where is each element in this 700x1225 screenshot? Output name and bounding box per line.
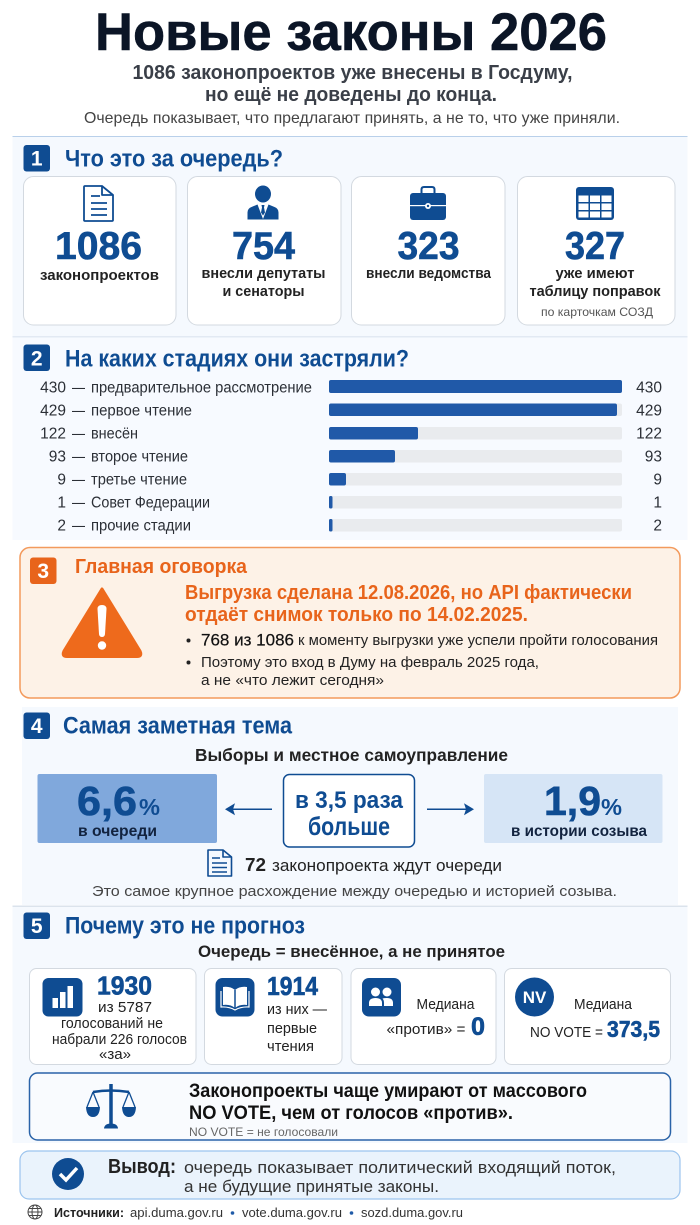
- card: 754: 754: [232, 225, 295, 268]
- banner: no vote conclusion: NO VOTE = не голосовали: [189, 1125, 338, 1139]
- badge 3: 3: [37, 560, 49, 583]
- ratio box: в 3,5 раза: [295, 787, 404, 814]
- warning bullets: Поэтому это вход в Думу на февраль 2025 года,: [201, 654, 539, 671]
- card: 323: 323: [398, 225, 460, 268]
- card: 323: [352, 176, 505, 325]
- card: 1914: [204, 968, 342, 1064]
- bar chart: stages: 122: [40, 426, 66, 442]
- bar chart: stages: прочие стадии: [91, 518, 191, 534]
- badge 1: [24, 145, 50, 172]
- card: 1914: из них —: [267, 1002, 327, 1018]
- sources footer: vote.duma.gov.ru: [242, 1205, 342, 1220]
- icon: NV badge: [515, 978, 554, 1016]
- warning bullets: 768 из 1086: [201, 632, 294, 650]
- card: 754: внесли депутаты: [202, 266, 326, 282]
- bar chart: stages: 93: [645, 448, 662, 466]
- warning bullets: а не «что лежит сегодня»: [201, 672, 384, 689]
- bar chart: stages: 430: [40, 380, 66, 396]
- warning headline: отдаёт снимок только по 14.02.2025.: [185, 603, 528, 626]
- card: 1930: из 5787: [98, 1000, 152, 1016]
- heading 5: Почему это не прогноз: [65, 912, 305, 940]
- bar chart: stages: первое чтение: [91, 402, 192, 420]
- card: 754: и сенаторы: [222, 284, 304, 300]
- panel: conclusion: а не будущие принятые законы.: [184, 1178, 439, 1196]
- card: 1914: чтения: [267, 1039, 314, 1055]
- bar chart: stages: —: [72, 380, 85, 396]
- card: 1930: голосований не: [61, 1016, 163, 1032]
- sources footer: api.duma.gov.ru: [130, 1205, 223, 1220]
- bar chart: stages: предварительное рассмотрение: [91, 380, 312, 396]
- bar chart: stages: 9: [57, 472, 66, 488]
- card: median against: 0: [471, 1013, 485, 1041]
- card: median no vote: [504, 968, 670, 1064]
- icon: scales: [86, 1084, 136, 1128]
- bar chart: stages: —: [72, 494, 85, 512]
- icon: people: [362, 978, 401, 1016]
- stat: history share: %: [601, 794, 622, 820]
- badge 3: [30, 558, 56, 584]
- badge 2: [24, 344, 50, 371]
- bar chart: stages: 122: [636, 426, 662, 442]
- ratio box: больше: [308, 811, 390, 841]
- card: 327: по карточкам СОЗД: [541, 305, 653, 319]
- banner: no vote conclusion: Законопроекты чаще умирают от массового: [189, 1080, 587, 1102]
- sources footer: sozd.duma.gov.ru: [361, 1205, 463, 1220]
- icon: bar chart: [42, 978, 82, 1016]
- banner: no vote conclusion: NO VOTE, чем от голосов «против».: [189, 1102, 513, 1124]
- bar chart: stages: 1: [653, 494, 662, 512]
- bar chart: stages: третье чтение: [91, 472, 187, 488]
- card: 1086: законопроектов: [40, 268, 159, 284]
- card: 1930: [30, 968, 196, 1064]
- card: median no vote: Медиана: [574, 997, 633, 1013]
- card: 1914: 1914: [267, 971, 318, 1001]
- card: 1086: [24, 176, 176, 325]
- ratio box: [284, 774, 414, 847]
- icon: warning triangle: [63, 589, 141, 656]
- bar chart: stages: второе чтение: [91, 448, 188, 466]
- subtitle: [132, 61, 572, 106]
- card: 1914: первые: [267, 1021, 317, 1037]
- stat: history share: [484, 774, 662, 843]
- badge 2: 2: [31, 348, 43, 370]
- card: median no vote: 373,5: [607, 1016, 660, 1042]
- stat: queue share: [38, 774, 217, 843]
- stat: history share: 1,9: [544, 778, 601, 824]
- icon: table: [576, 187, 614, 220]
- card: 1930: набрали 226 голосов: [52, 1032, 187, 1048]
- bar chart: stages: —: [72, 472, 85, 488]
- arrow right: [427, 803, 474, 815]
- card: 327: таблицу поправок: [530, 284, 661, 300]
- badge 4: 4: [31, 715, 43, 738]
- panel: section 3 warning: [20, 548, 680, 698]
- bar chart: stages: 9: [653, 472, 662, 488]
- card: median no vote: NO VOTE =: [530, 1025, 603, 1041]
- bar chart: stages: —: [72, 448, 85, 466]
- waiting bills count: 72: [245, 854, 266, 875]
- panel: conclusion: очередь показывает политический входящий поток,: [184, 1159, 616, 1177]
- panel: section 5: [12, 907, 688, 1143]
- card: 327: уже имеют: [556, 266, 634, 282]
- panel: section 2: [12, 338, 688, 540]
- warning bullets: [186, 632, 658, 689]
- bar chart: stages: 93: [49, 448, 66, 466]
- card: median against: Медиана: [416, 997, 475, 1013]
- bar chart: stages: 430: [636, 380, 662, 396]
- card: median against: [351, 968, 496, 1064]
- bar chart: stages: 429: [40, 402, 66, 420]
- warning headline: [185, 581, 632, 626]
- warning headline: Выгрузка сделана 12.08.2026, но API фактически: [185, 581, 632, 604]
- icon: check: [52, 1158, 84, 1190]
- bar chart: stages: Совет Федерации: [91, 494, 210, 512]
- card: 1086: 1086: [55, 225, 142, 268]
- panel: conclusion: Вывод:: [108, 1156, 176, 1178]
- bar chart: stages: 429: [636, 402, 662, 420]
- arrow left: [225, 803, 272, 815]
- bar chart: stages: —: [72, 402, 85, 420]
- stat: history share: в истории созыва: [511, 823, 647, 840]
- icon: document small: [208, 850, 232, 876]
- card: 754: [188, 176, 341, 325]
- heading 2: На каких стадиях они застряли?: [65, 346, 409, 372]
- card: 323: внесли ведомства: [366, 266, 492, 282]
- badge 1: 1: [31, 148, 43, 170]
- panel: section 4: [22, 707, 678, 905]
- badge 5: [24, 912, 50, 939]
- warning bullets: к моменту выгрузки уже успели пройти голосования: [298, 633, 658, 649]
- bar chart: stages: —: [72, 426, 85, 442]
- header: [84, 3, 620, 127]
- banner: no vote conclusion: [30, 1073, 670, 1140]
- icon: document: [84, 186, 113, 221]
- stat: queue share: в очереди: [78, 823, 157, 840]
- panel: section 1: [12, 137, 688, 336]
- icon: person: [248, 186, 278, 220]
- stat: queue share: 6,6: [77, 778, 137, 824]
- bar chart: stages: —: [72, 518, 85, 534]
- explanatory line: Очередь показывает, что предлагают принять, а не то, что уже приняли.: [84, 110, 620, 127]
- panel: conclusion: [20, 1151, 680, 1199]
- subtitle: но ещё не доведены до конца.: [205, 83, 497, 106]
- sources footer: Источники:: [54, 1205, 124, 1220]
- bar chart: stages: [40, 380, 662, 534]
- section subtitle: Очередь = внесённое, а не принятое: [198, 943, 505, 961]
- card: median against: «против» =: [386, 1022, 466, 1038]
- card: 1930: 1930: [97, 970, 152, 1000]
- bar chart: stages: внесён: [91, 426, 138, 442]
- heading 4: Самая заметная тема: [63, 712, 293, 740]
- badge 5: 5: [31, 915, 43, 938]
- topic subtitle: Выборы и местное самоуправление: [195, 745, 508, 765]
- icon: NV badge: NV: [523, 988, 547, 1007]
- stat: queue share: %: [139, 794, 160, 820]
- card: 1930: «за»: [99, 1047, 131, 1063]
- heading 3: Главная оговорка: [75, 555, 248, 578]
- title: Новые законы 2026: [95, 3, 607, 62]
- note: Это самое крупное расхождение между очередью и историей созыва.: [92, 883, 617, 900]
- card: 327: 327: [565, 225, 625, 268]
- sources footer: [28, 1205, 463, 1220]
- bar chart: stages: 1: [57, 494, 66, 512]
- card: 327: [518, 176, 675, 325]
- icon: briefcase: [410, 187, 446, 220]
- bar chart: stages: 2: [653, 518, 662, 534]
- bar chart: stages: 2: [57, 518, 66, 534]
- icon: globe: [28, 1205, 42, 1219]
- heading 1: Что это за очередь?: [65, 146, 283, 172]
- icon: book: [216, 978, 254, 1016]
- badge 4: [24, 712, 50, 739]
- subtitle: 1086 законопроектов уже внесены в Госдуму,: [132, 61, 572, 84]
- waiting bills count: законопроекта ждут очереди: [272, 857, 502, 875]
